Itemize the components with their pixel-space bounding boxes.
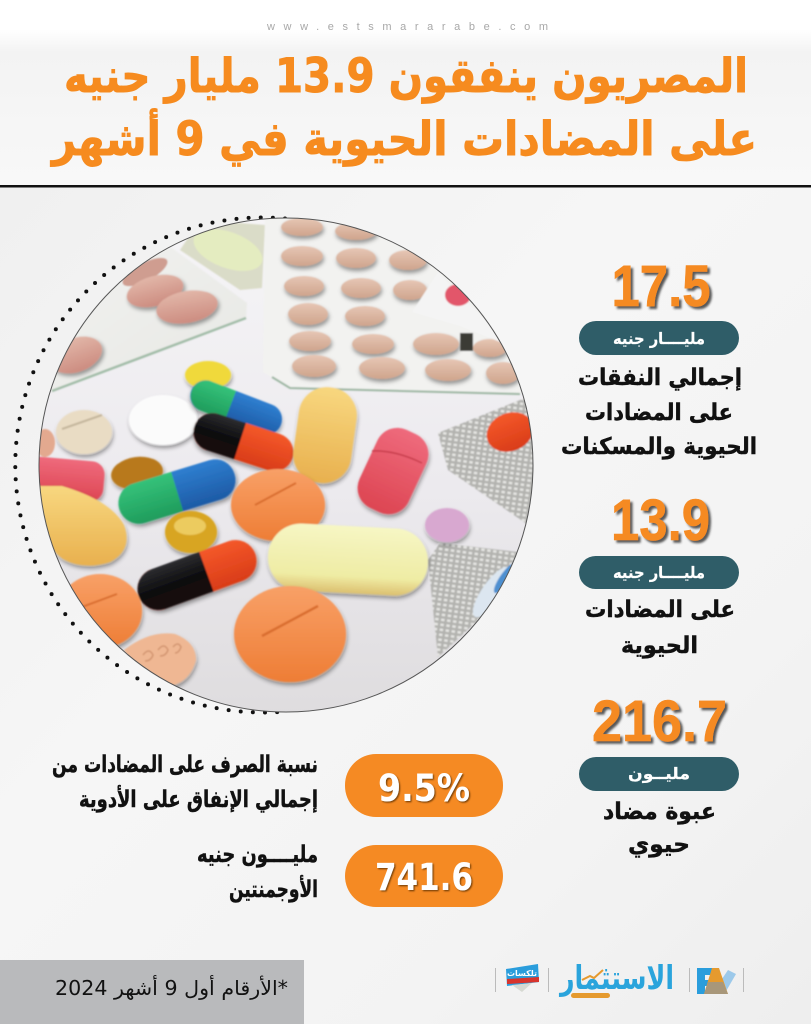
large yellow tablet left <box>38 486 127 566</box>
website url: www.estsmararabe.com <box>266 21 548 33</box>
stat: 17.5 billion: 17.5 <box>612 254 710 319</box>
white pill <box>129 395 197 445</box>
logo: FA <box>697 968 736 994</box>
pink oblong pill <box>356 426 432 520</box>
logo: news flag: تلكسات <box>507 969 537 978</box>
black and red capsule top <box>191 412 294 472</box>
logo: Alistithmar: الاستثمار <box>558 958 674 997</box>
stat: 17.5 billion: إجمالي النفقات <box>578 365 742 391</box>
stat: 13.9 billion: 13.9 <box>611 488 710 553</box>
central blister pack <box>271 218 521 396</box>
stat: 216.7 million: مليــون <box>628 764 690 783</box>
stat: 13.9 billion <box>579 488 739 659</box>
silver foil with red capsule <box>438 398 540 524</box>
photo: assorted pills and capsules <box>23 210 540 720</box>
green and blue capsule middle <box>113 454 241 529</box>
title: المصريون ينفقون 13.9 مليار جنيه <box>64 49 748 104</box>
orange scored tablet <box>231 469 325 541</box>
long cream pill <box>266 522 430 597</box>
callout: 9.5 percent: نسبة الصرف على المضادات من <box>52 752 318 778</box>
black and red capsule lower <box>132 534 262 616</box>
callout: 741.6 million <box>197 842 503 907</box>
callout: 9.5 percent: إجمالي الإنفاق على الأدوية <box>79 784 318 813</box>
brown oval <box>109 454 165 492</box>
callout: 9.5 percent: 9.5% <box>378 767 470 810</box>
stat: 216.7 million: 216.7 <box>592 689 727 754</box>
footnote: *الأرقام أول 9 أشهر 2024 <box>55 975 288 1000</box>
peach imprinted tablet <box>124 633 196 686</box>
callout: 741.6 million: 741.6 <box>375 856 473 899</box>
stat: 17.5 billion: مليــــار جنيه <box>613 329 705 348</box>
title: على المضادات الحيوية في 9 أشهر <box>50 108 757 167</box>
silver foil lower right <box>428 543 519 657</box>
logo: news flag <box>506 964 539 992</box>
stat: 17.5 billion <box>561 254 757 460</box>
stat: 17.5 billion: الحيوية والمسكنات <box>561 434 757 460</box>
stat: 216.7 million <box>579 689 739 858</box>
stat: 216.7 million: حيوي <box>628 832 690 858</box>
dotted arc around photo <box>15 218 285 713</box>
folded foil corner <box>412 272 505 351</box>
green and blue capsule top <box>188 379 284 434</box>
stat: 13.9 billion: على المضادات <box>585 597 735 623</box>
title <box>50 49 757 167</box>
large orange tablet <box>234 586 346 682</box>
small pale green blister <box>180 220 268 290</box>
pale yellow oblong pill <box>290 383 360 487</box>
lilac round pill <box>425 508 469 542</box>
orange tablet lower left <box>58 574 142 648</box>
cream scored tablet <box>56 410 112 454</box>
yellow round pill <box>185 361 231 389</box>
stat: 17.5 billion: على المضادات <box>585 400 733 426</box>
stat: 13.9 billion: مليــــار جنيه <box>613 563 705 582</box>
upper left blister pack <box>51 249 247 392</box>
callout: 741.6 million: مليــــون جنيه <box>197 842 318 868</box>
footnote <box>0 960 304 1024</box>
amber gel capsule <box>165 511 217 553</box>
pink pill left <box>40 456 108 502</box>
callout: 9.5 percent <box>52 752 503 817</box>
stat: 216.7 million: عبوة مضاد <box>603 799 716 825</box>
callout: 741.6 million: الأوجمنتين <box>229 874 318 903</box>
stat: 13.9 billion: الحيوية <box>621 633 698 659</box>
